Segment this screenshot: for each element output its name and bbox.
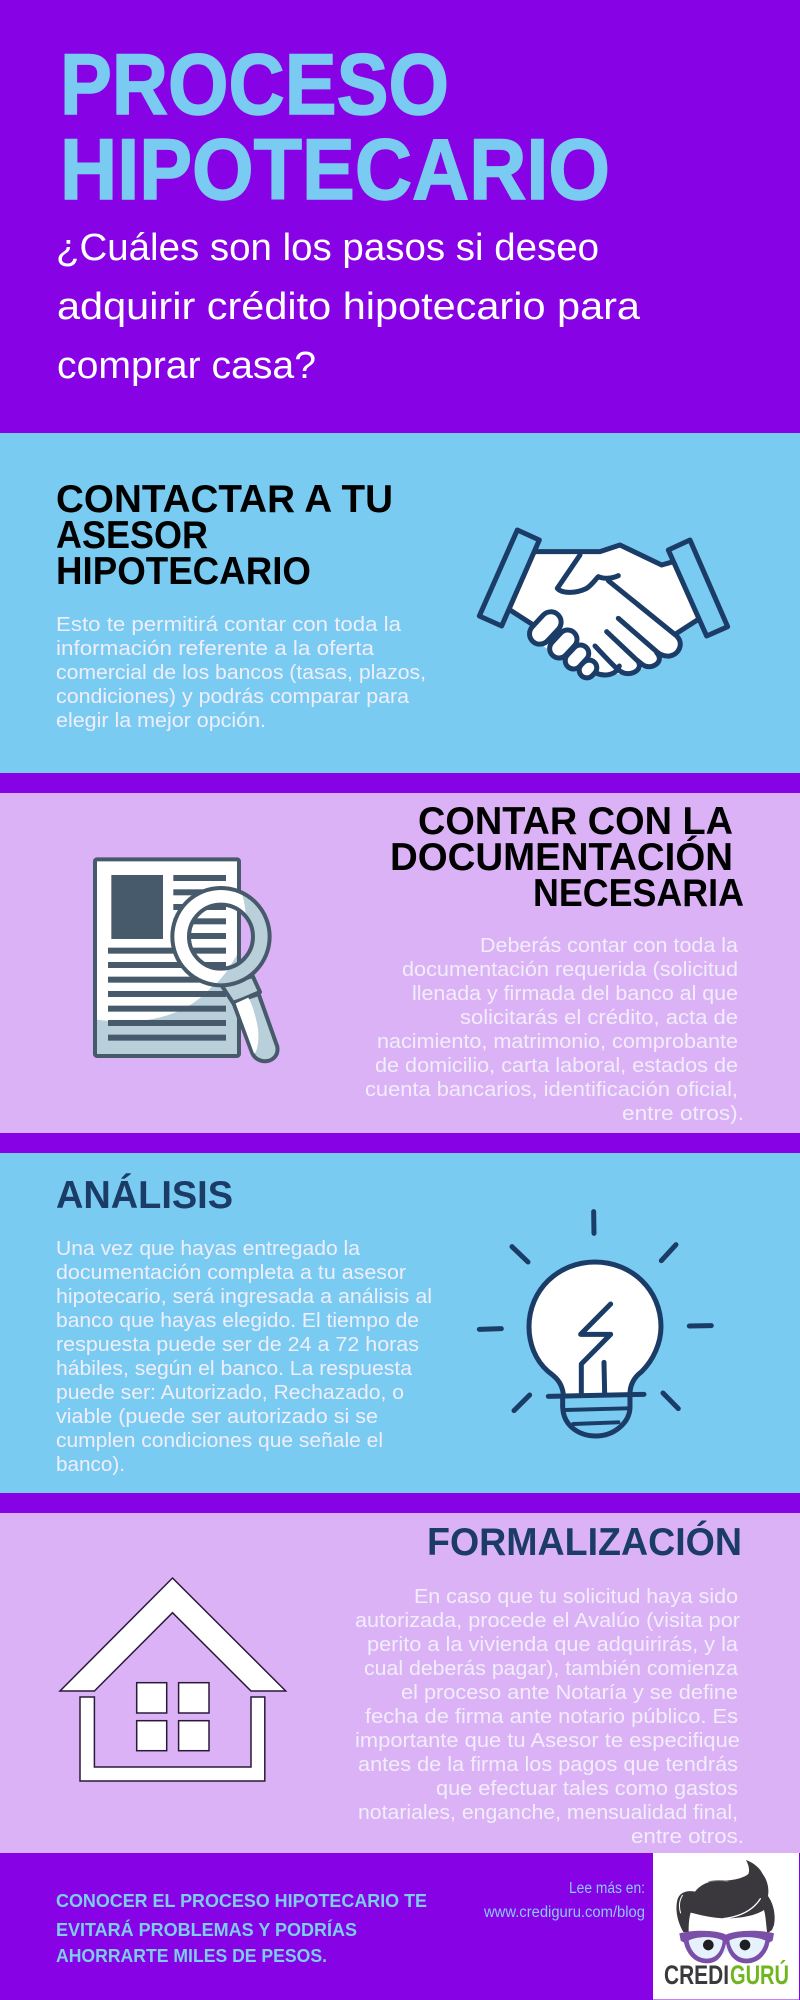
read more link: www.crediguru.com/blog	[483, 1904, 645, 1921]
body text: contactar: información referente a la oferta	[56, 638, 375, 660]
body text: analisis: documentación completa a tu asesor	[56, 1262, 406, 1284]
body text: contactar: Esto te permitirá contar con toda la	[56, 614, 402, 636]
heading: contactar a tu asesor hipotecario	[56, 478, 393, 593]
body text: documentacion: solicitarás el crédito, acta de	[460, 1007, 738, 1029]
heading: contactar a tu asesor hipotecario: HIPOTECARIO	[56, 550, 311, 593]
body text: documentacion: de domicilio, carta laboral, estados de	[375, 1055, 738, 1077]
heading: contar con la documentacion necesaria: NECESARIA	[533, 872, 744, 915]
body text: contactar	[56, 614, 426, 732]
body text: documentacion: nacimiento, matrimonio, comprobante	[377, 1031, 738, 1053]
body text: documentacion: documentación requerida (solicitud	[402, 959, 738, 981]
body text: analisis	[56, 1238, 432, 1476]
subtitle: adquirir crédito hipotecario para	[57, 286, 641, 328]
heading: contar con la documentacion necesaria	[390, 800, 744, 915]
footer	[0, 1853, 800, 2000]
body text: analisis: hábiles, según el banco. La respuesta	[56, 1358, 413, 1380]
heading: contactar a tu asesor hipotecario: ASESOR	[56, 514, 208, 557]
panel: formalizacion	[0, 1513, 800, 1853]
heading: contactar a tu asesor hipotecario: CONTACTAR A TU	[56, 478, 393, 521]
body text: analisis: banco que hayas elegido. El tiempo de	[56, 1310, 419, 1332]
body text: analisis: puede ser: Autorizado, Rechazado, o	[56, 1382, 404, 1404]
footer message: AHORRARTE MILES DE PESOS.	[56, 1946, 327, 1966]
body text: contactar: condiciones) y podrás comparar para	[56, 686, 410, 708]
heading: formalizacion: FORMALIZACIÓN	[427, 1520, 742, 1564]
body text: analisis: Una vez que hayas entregado la	[56, 1238, 361, 1260]
body text: formalizacion: entre otros.	[631, 1826, 744, 1848]
body text: formalizacion: el proceso ante Notaría y se define	[401, 1682, 738, 1704]
body text: documentacion	[365, 935, 744, 1125]
body text: analisis: respuesta puede ser de 24 a 72 horas	[56, 1334, 419, 1356]
body text: contactar: comercial de los bancos (tasas, plazos,	[56, 662, 426, 684]
body text: analisis: banco).	[56, 1454, 125, 1476]
panel: analisis	[0, 1153, 800, 1493]
icon: document with magnifying glass	[95, 859, 278, 1061]
body text: documentacion: entre otros).	[622, 1103, 744, 1125]
body text: analisis: hipotecario, será ingresada a análisis al	[56, 1286, 432, 1308]
body text: formalizacion: fecha de firma ante notario público. Es	[365, 1706, 738, 1728]
footer message: CONOCER EL PROCESO HIPOTECARIO TE	[56, 1891, 427, 1911]
read more link	[483, 1880, 645, 1921]
heading: contar con la documentacion necesaria: DOCUMENTACIÓN	[390, 835, 733, 879]
body text: formalizacion: notariales, enganche, mensualidad final,	[358, 1802, 738, 1824]
footer message: EVITARÁ PROBLEMAS Y PODRÍAS	[56, 1919, 357, 1940]
icon: handshake	[479, 530, 728, 681]
subtitle: comprar casa?	[57, 345, 316, 387]
heading: contar con la documentacion necesaria: CONTAR CON LA	[418, 800, 733, 843]
icon: light bulb	[479, 1212, 711, 1436]
title: PROCESO	[60, 37, 449, 133]
panel: contar con la documentacion	[0, 793, 800, 1133]
body text: formalizacion: importante que tu Asesor te especifique	[355, 1730, 740, 1752]
logo: crediguru	[653, 1853, 799, 2000]
icon: house	[60, 1578, 286, 1781]
title	[60, 37, 610, 218]
read more link: Lee más en:	[569, 1880, 645, 1897]
body text: formalizacion: En caso que tu solicitud haya sido	[414, 1586, 738, 1608]
logo: crediguru: CREDI	[664, 1960, 729, 1990]
body text: documentacion: cuenta bancarios, identificación oficial,	[365, 1079, 738, 1101]
footer message	[56, 1891, 427, 1966]
subtitle: ¿Cuáles son los pasos si deseo	[56, 227, 599, 269]
body text: formalizacion: antes de la firma los pagos que tendrás	[358, 1754, 738, 1776]
body text: formalizacion: perito a la vivienda que adquirirás, y la	[367, 1634, 739, 1656]
body text: formalizacion: que efectuar tales como gastos	[436, 1778, 738, 1800]
subtitle	[56, 227, 641, 387]
heading: analisis: ANÁLISIS	[56, 1173, 233, 1217]
body text: formalizacion: autorizada, procede el Avalúo (visita por	[355, 1610, 740, 1632]
panel: contactar a tu asesor	[0, 433, 800, 773]
title: HIPOTECARIO	[60, 122, 610, 218]
body text: analisis: viable (puede ser autorizado si se	[56, 1406, 378, 1428]
body text: contactar: elegir la mejor opción.	[56, 710, 266, 732]
body text: formalizacion	[355, 1586, 744, 1848]
body text: analisis: cumplen condiciones que señale el	[56, 1430, 383, 1452]
body text: documentacion: llenada y firmada del banco al que	[412, 983, 738, 1005]
body text: documentacion: Deberás contar con toda la	[480, 935, 739, 957]
body text: formalizacion: cual deberás pagar), también comienza	[364, 1658, 739, 1680]
